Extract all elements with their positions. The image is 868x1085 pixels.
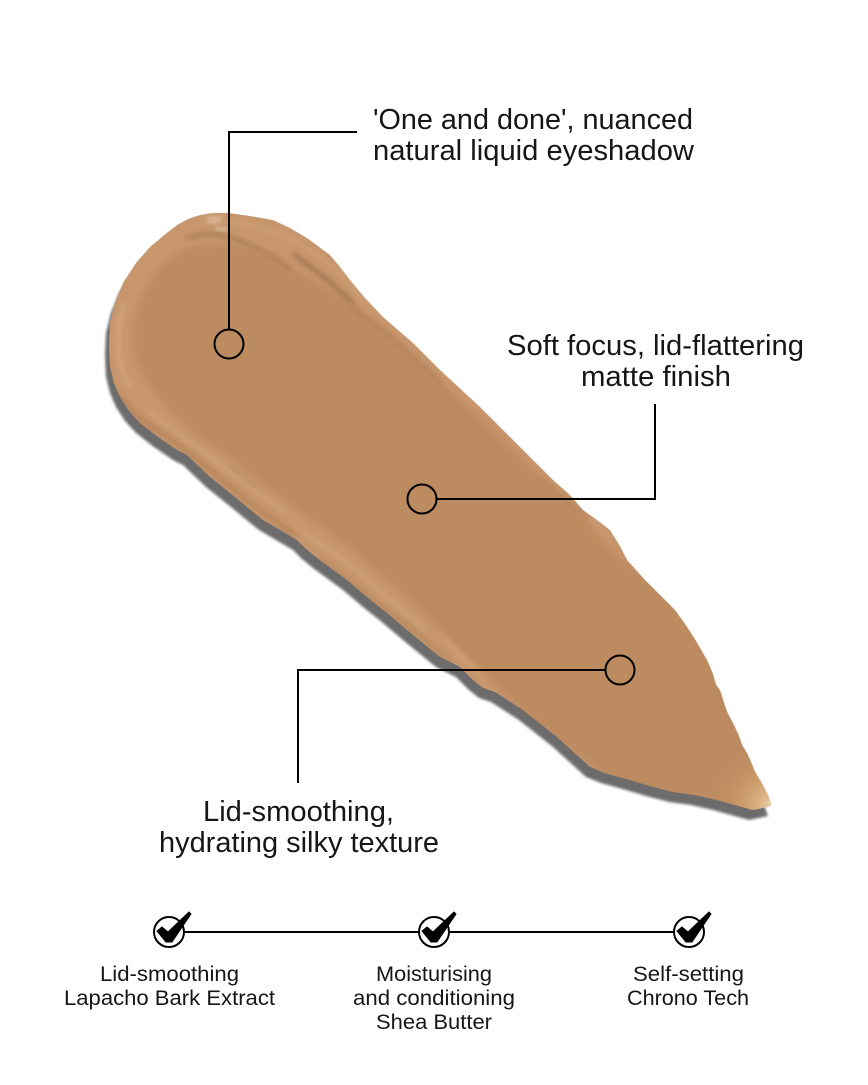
marker	[408, 484, 436, 514]
marker	[214, 330, 244, 358]
swatch matte centre	[133, 244, 790, 820]
benefit: shea butter: Moisturising	[376, 963, 492, 986]
marker	[606, 656, 634, 684]
tip highlight	[731, 770, 772, 810]
callout text: matte finish	[581, 361, 731, 393]
leader line	[229, 132, 357, 330]
callout text: Soft focus, lid-flattering	[507, 330, 804, 362]
benefit: shea butter: Shea Butter	[376, 1011, 492, 1034]
leader line	[298, 670, 605, 783]
benefit: chrono tech: Self-setting	[633, 963, 744, 986]
benefit: chrono tech: Chrono Tech	[627, 987, 749, 1010]
benefit: lapacho bark: Lapacho Bark Extract	[64, 987, 275, 1010]
swatch shadow	[105, 223, 768, 820]
callout text: 'One and done', nuanced	[373, 104, 693, 136]
connecting line	[184, 931, 675, 933]
fold shadows	[118, 235, 612, 660]
swatch body	[109, 213, 790, 820]
benefit: shea butter: and conditioning	[353, 987, 515, 1010]
callout text: Lid-smoothing,	[203, 796, 394, 828]
callout: one and done	[214, 104, 695, 358]
benefit: lapacho bark: Lid-smoothing	[100, 963, 239, 986]
icon: check 2	[419, 912, 456, 947]
swatch: liquid eyeshadow smear	[105, 213, 790, 820]
callout: lid-smoothing	[159, 656, 634, 859]
leader line	[436, 404, 655, 499]
callout text: natural liquid eyeshadow	[373, 135, 695, 167]
benefits timeline	[154, 912, 711, 947]
callout: soft focus	[408, 330, 804, 514]
callout text: hydrating silky texture	[159, 827, 439, 859]
gloss	[207, 218, 228, 229]
rim highlights	[116, 306, 611, 539]
icon: check 3	[674, 912, 711, 947]
icon: check 1	[154, 912, 191, 947]
